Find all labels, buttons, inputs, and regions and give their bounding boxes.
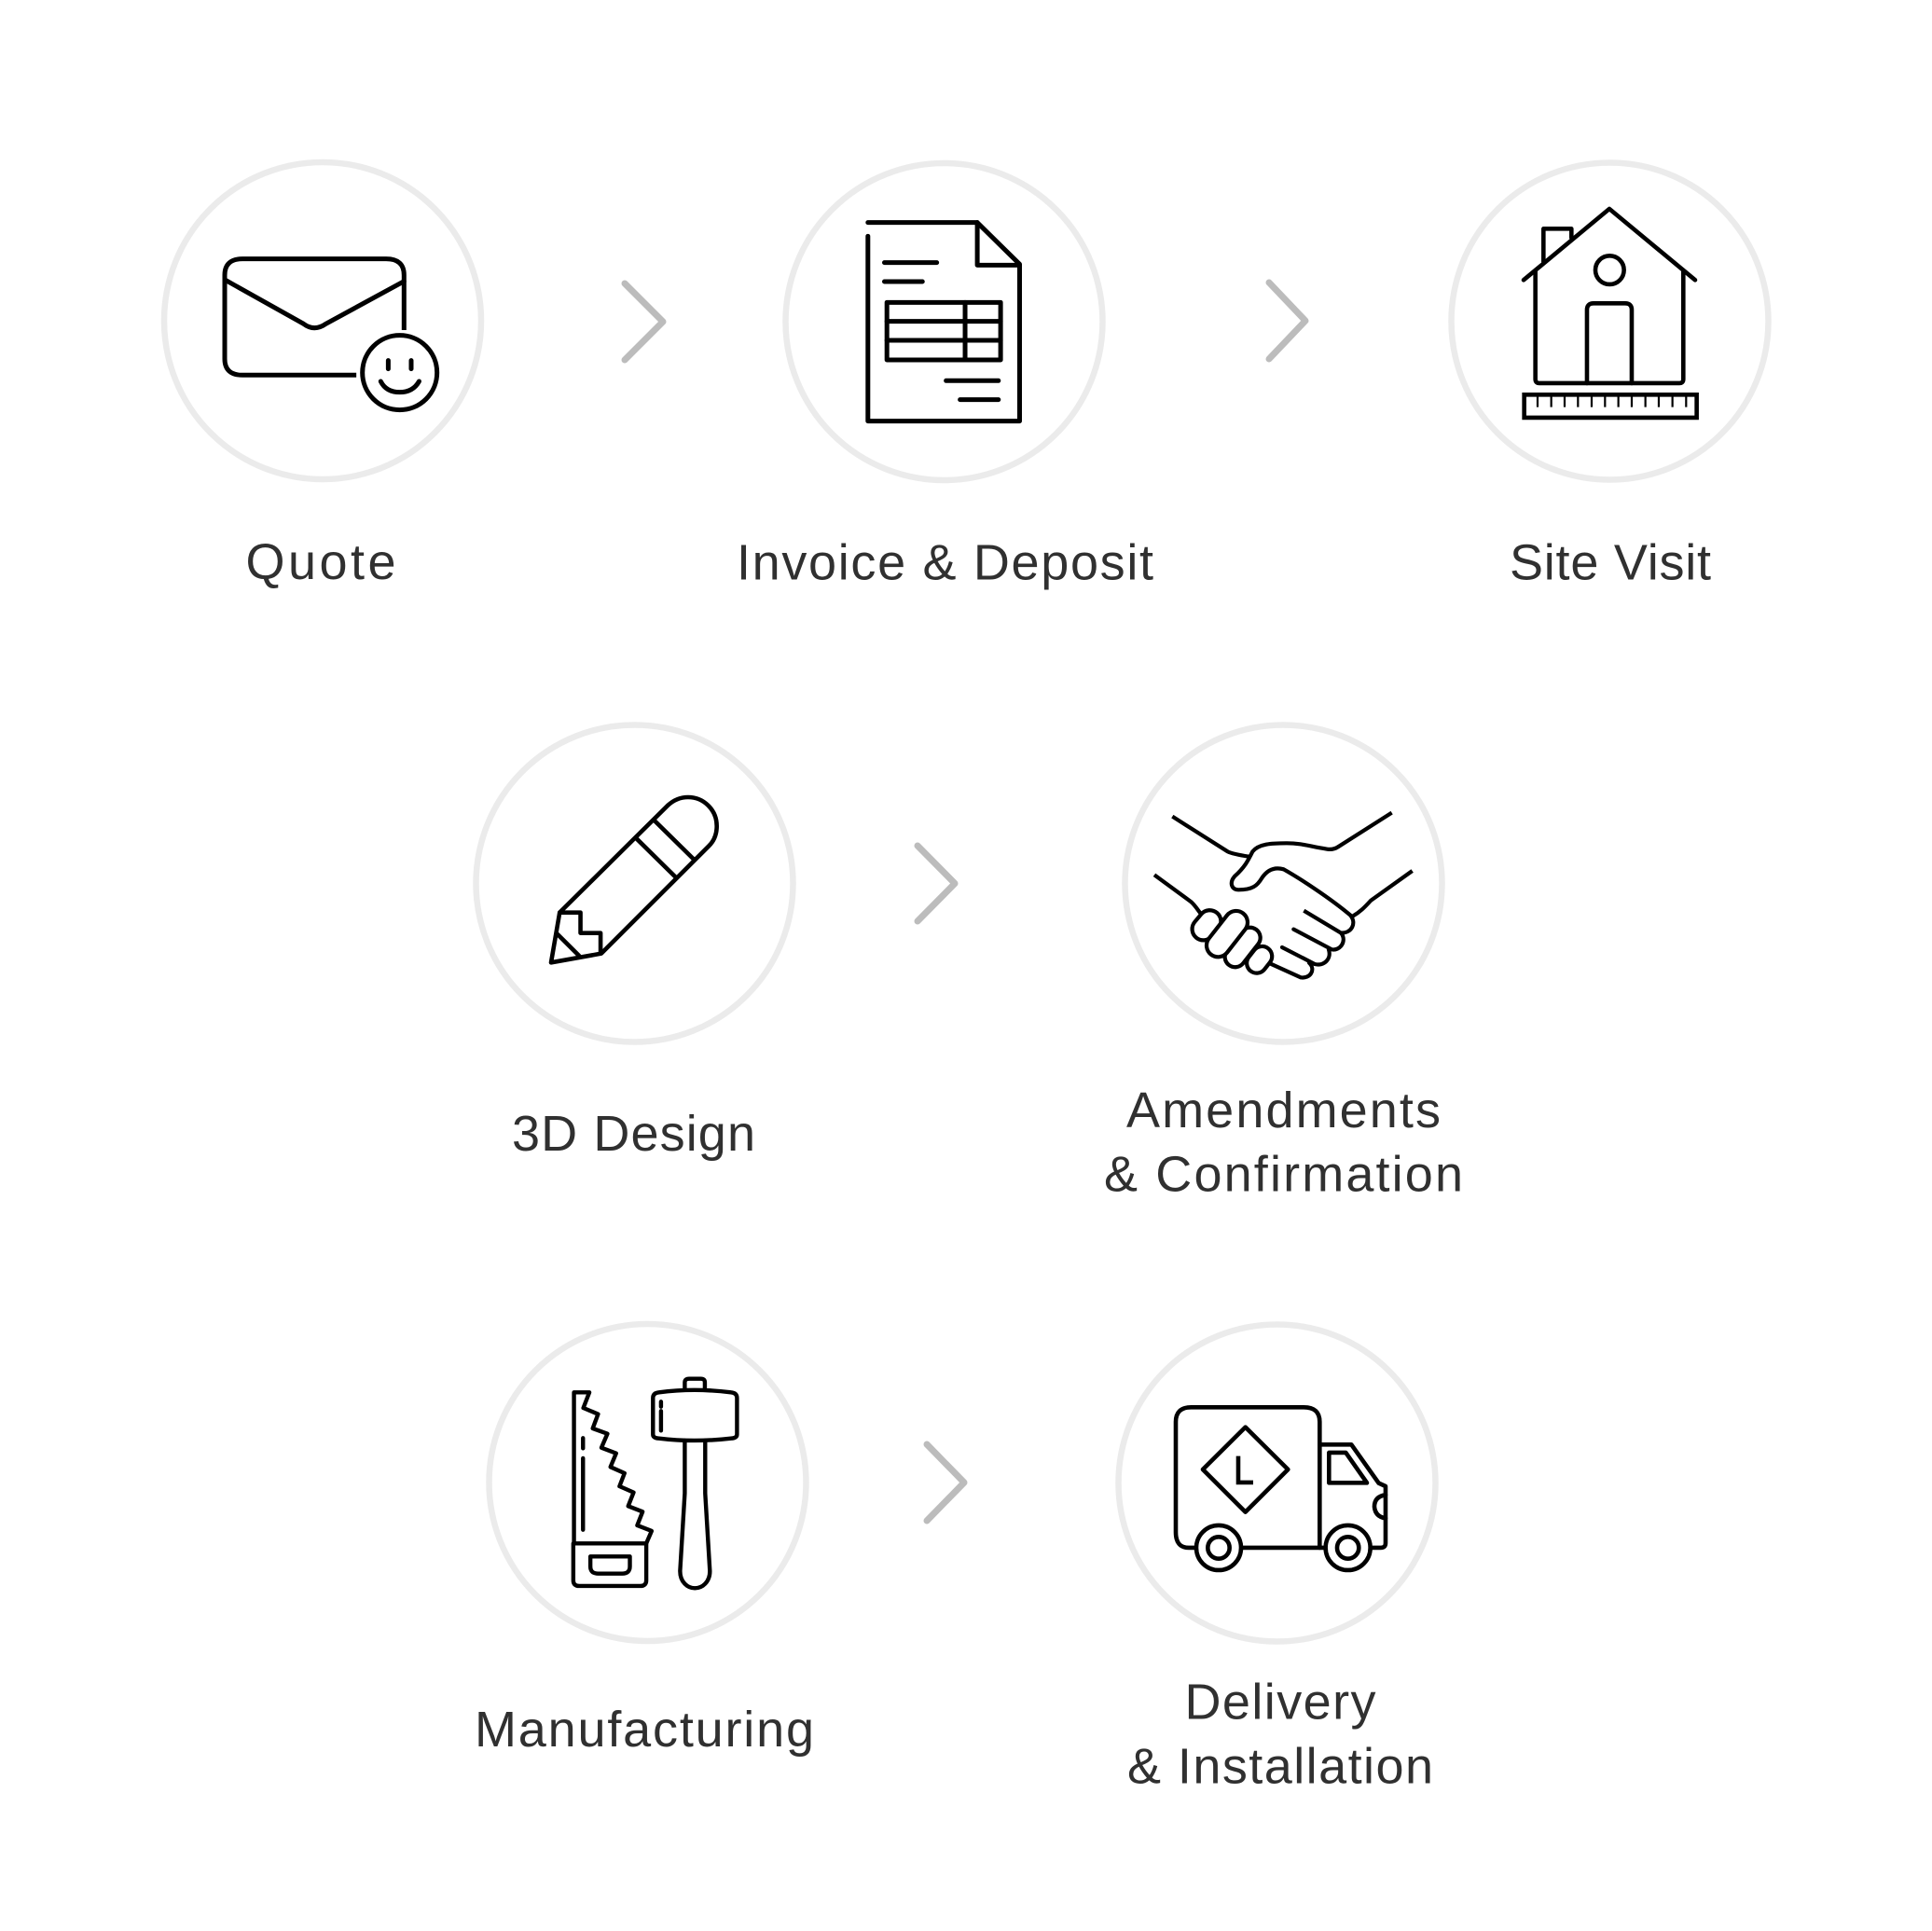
icon: delivery truck [1176,1407,1386,1570]
label: Manufacturing: Manufacturing [475,1702,814,1758]
label: Invoice & Deposit: Invoice & Deposit [737,535,1153,591]
step: Manufacturing [475,1324,814,1758]
icon: handshake [1154,813,1413,977]
step: Amendments & Confirmation [1104,725,1463,1203]
label: Delivery & Installation: Delivery [1184,1675,1376,1731]
ring: Manufacturing [489,1324,806,1641]
icon: invoice document [868,223,1019,421]
step: Quote [164,162,481,590]
icon: house on ruler [1524,209,1697,418]
icon: saw and mallet [573,1379,737,1588]
step: Invoice & Deposit [737,163,1153,591]
label: Amendments & Confirmation: & Confirmation [1104,1147,1463,1203]
label: 3D Design: 3D Design [512,1106,755,1162]
step: Site Visit [1451,162,1768,591]
ring: Delivery [1119,1324,1436,1641]
step: Delivery & Installation [1119,1324,1436,1794]
arrow: Invoice to Site Visit [1269,283,1305,359]
label: Quote: Quote [246,534,395,590]
icon: envelope with smiley [225,259,437,410]
arrow: 3D Design to Amendments [918,846,955,921]
ring: 3D Design [476,725,793,1042]
ring: Quote [164,162,481,479]
arrow: Manufacturing to Delivery [927,1444,964,1521]
icon: pencil [551,797,717,962]
label: Amendments & Confirmation: Amendments [1126,1083,1441,1138]
label: Site Visit: Site Visit [1510,535,1711,591]
arrow: Quote to Invoice [625,283,663,360]
label: Delivery & Installation: & Installation [1127,1738,1433,1794]
ring: Amendments [1125,725,1442,1042]
ring: Invoice [785,163,1102,480]
ring: Site Visit [1451,162,1768,479]
step: 3D Design [476,725,793,1162]
